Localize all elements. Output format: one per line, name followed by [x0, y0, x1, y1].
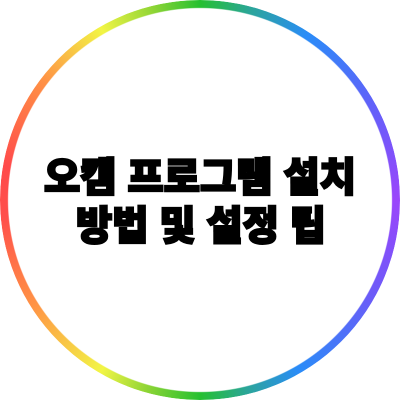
title line 2: 방법 및 설정 팁 [76, 204, 326, 248]
title line 1: 오캠 프로그램 설치 [44, 156, 356, 200]
